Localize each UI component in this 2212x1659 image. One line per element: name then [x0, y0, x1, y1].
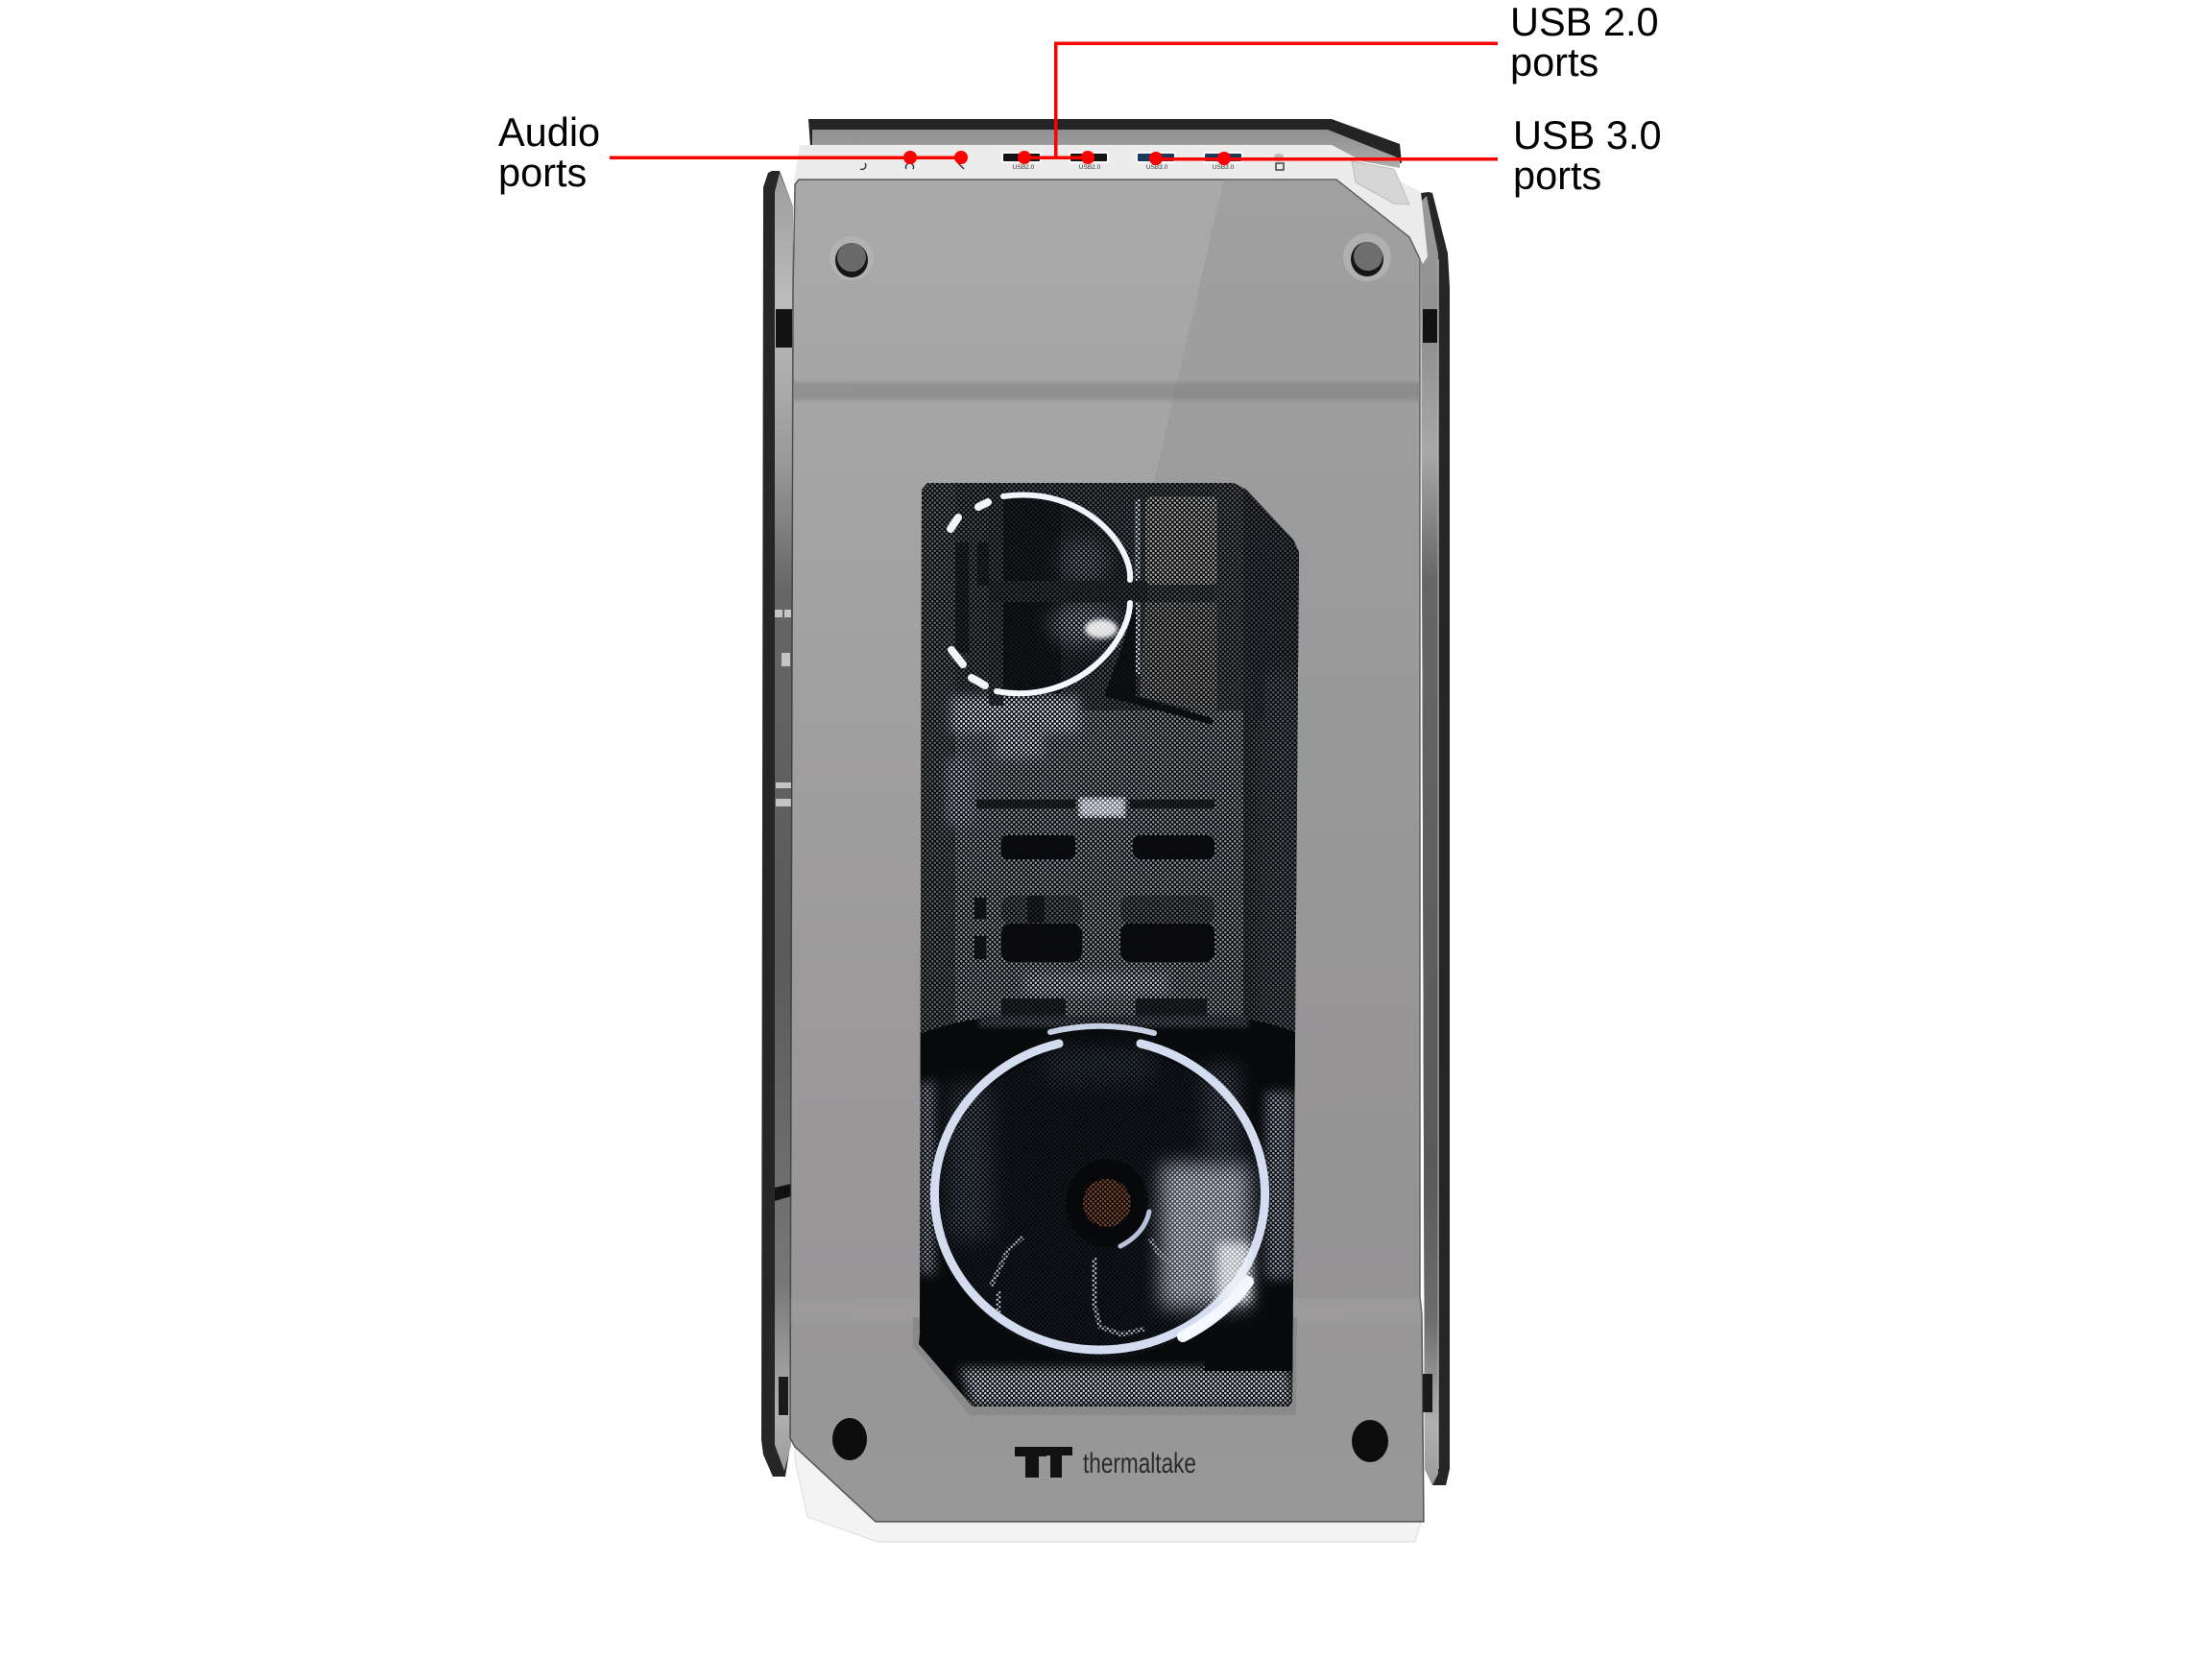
- callout: USB 3.0 ports: ports: [1513, 153, 1601, 198]
- port strip: USB2.0: [1079, 164, 1101, 171]
- screws: [830, 233, 1391, 1462]
- callout: USB 2.0 ports: USB 2.0: [1510, 0, 1659, 44]
- interior: drive cages: [1104, 496, 1264, 725]
- window with mesh: [912, 480, 1315, 1411]
- fan light rings: [935, 495, 1265, 1350]
- port strip: USB2.0: [1013, 164, 1035, 171]
- white front frame: [794, 145, 1428, 264]
- glass fold band: [787, 382, 1440, 400]
- callout: USB 2.0 ports: ports: [1510, 39, 1599, 84]
- port strip: USB3.0: [1213, 164, 1235, 171]
- interior: card slots: [974, 835, 1214, 1021]
- light glows: [1080, 619, 1250, 1306]
- port strip: [860, 152, 1284, 171]
- right vent plate: [1352, 161, 1409, 204]
- USB 3.0 leader line: [1149, 152, 1498, 165]
- callout: USB 3.0 ports: USB 3.0: [1513, 112, 1662, 157]
- callout: audio ports: [498, 109, 968, 195]
- top gray surface: [812, 130, 1400, 168]
- top black edge: [808, 119, 1402, 163]
- perforated mesh: [912, 480, 1315, 1411]
- glass reflection: [1166, 180, 1420, 1298]
- window bevel: [913, 1317, 1297, 1415]
- lower lighter band: [787, 1298, 1440, 1323]
- computer case: [761, 119, 1450, 1542]
- left side panel: [761, 171, 793, 1477]
- thermaltake logo: thermaltake: [1083, 1448, 1196, 1479]
- callout: USB 2.0 ports: [1018, 0, 1659, 164]
- audio leader line: [610, 151, 968, 164]
- glass front panel: [787, 180, 1440, 1522]
- USB 2.0 leader line: [1018, 42, 1498, 164]
- callout: audio ports: ports: [498, 150, 587, 195]
- right side panel: [1421, 192, 1450, 1485]
- callout: audio ports: Audio: [498, 109, 600, 155]
- callout: USB 3.0 ports: [1149, 112, 1662, 198]
- interior: centre lit wall: [946, 696, 1243, 1027]
- interior: top fan: [955, 485, 1147, 706]
- interior: bottom fan: [912, 1016, 1315, 1411]
- bottom white trim: [795, 1445, 1421, 1542]
- interior: side gradients: [912, 480, 1315, 1037]
- port strip: USB3.0: [1146, 164, 1168, 171]
- thermaltake logo: [1015, 1447, 1196, 1479]
